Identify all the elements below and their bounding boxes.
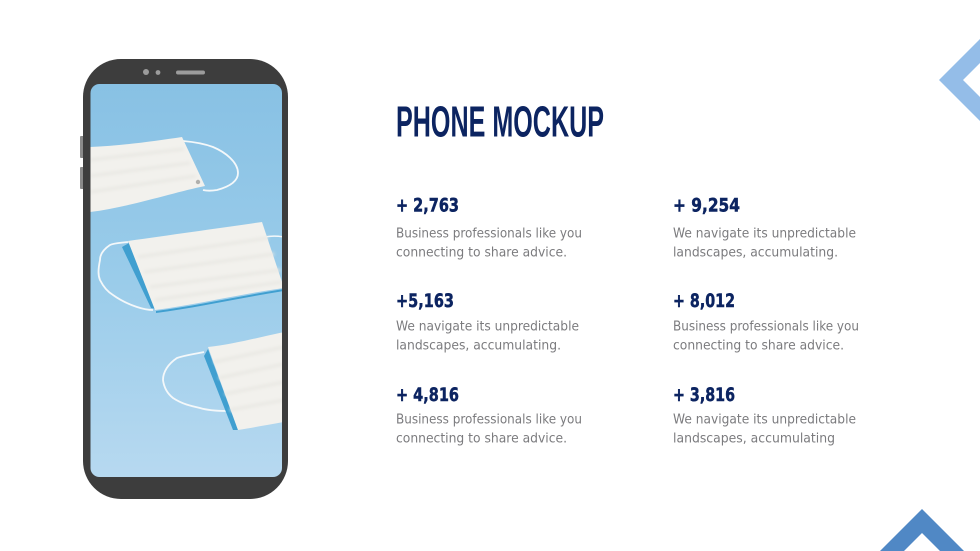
phone mockup (80, 59, 288, 499)
decorative chevron: top right (939, 39, 980, 121)
stat: 8,012: connecting to share advice. (673, 338, 844, 354)
stat: 8,012: + 8,012 (673, 290, 735, 312)
decorative chevron: bottom right (880, 509, 964, 551)
mask 2 (98, 222, 284, 313)
mask 1 (90, 137, 238, 212)
stat: 5,163: landscapes, accumulating. (396, 338, 561, 354)
stat: 5,163 (396, 290, 579, 354)
stat: 8,012 (673, 290, 859, 354)
phone camera and speaker (143, 69, 205, 75)
stat: 2,763: connecting to share advice. (396, 246, 567, 260)
stat: 3,816 (673, 384, 856, 446)
stat: 9,254: + 9,254 (673, 194, 740, 216)
phone screen photo: face masks on blue (90, 84, 284, 478)
stat: 5,163: +5,163 (396, 290, 454, 312)
stat: 3,816: + 3,816 (673, 384, 735, 406)
mask 3 (163, 332, 284, 430)
phone side buttons (80, 136, 84, 189)
stat: 4,816: + 4,816 (396, 384, 459, 406)
title: PHONE MOCKUP (396, 98, 604, 146)
phone body (83, 59, 288, 499)
stat: 4,816: Business professionals like you (396, 412, 582, 428)
stat: 9,254: We navigate its unpredictable (673, 226, 856, 242)
stat: 2,763: + 2,763 (396, 194, 459, 216)
stat: 3,816: We navigate its unpredictable (673, 412, 856, 428)
stat: 8,012: Business professionals like you (673, 320, 859, 334)
stat: 3,816: landscapes, accumulating (673, 432, 835, 446)
stat: 2,763: Business professionals like you (396, 226, 582, 242)
stat: 4,816: connecting to share advice. (396, 432, 567, 446)
stat: 9,254: landscapes, accumulating. (673, 246, 838, 260)
stat: 4,816 (396, 384, 582, 446)
stat: 9,254 (673, 194, 856, 260)
stat: 5,163: We navigate its unpredictable (396, 320, 579, 334)
stat: 2,763 (396, 194, 582, 260)
